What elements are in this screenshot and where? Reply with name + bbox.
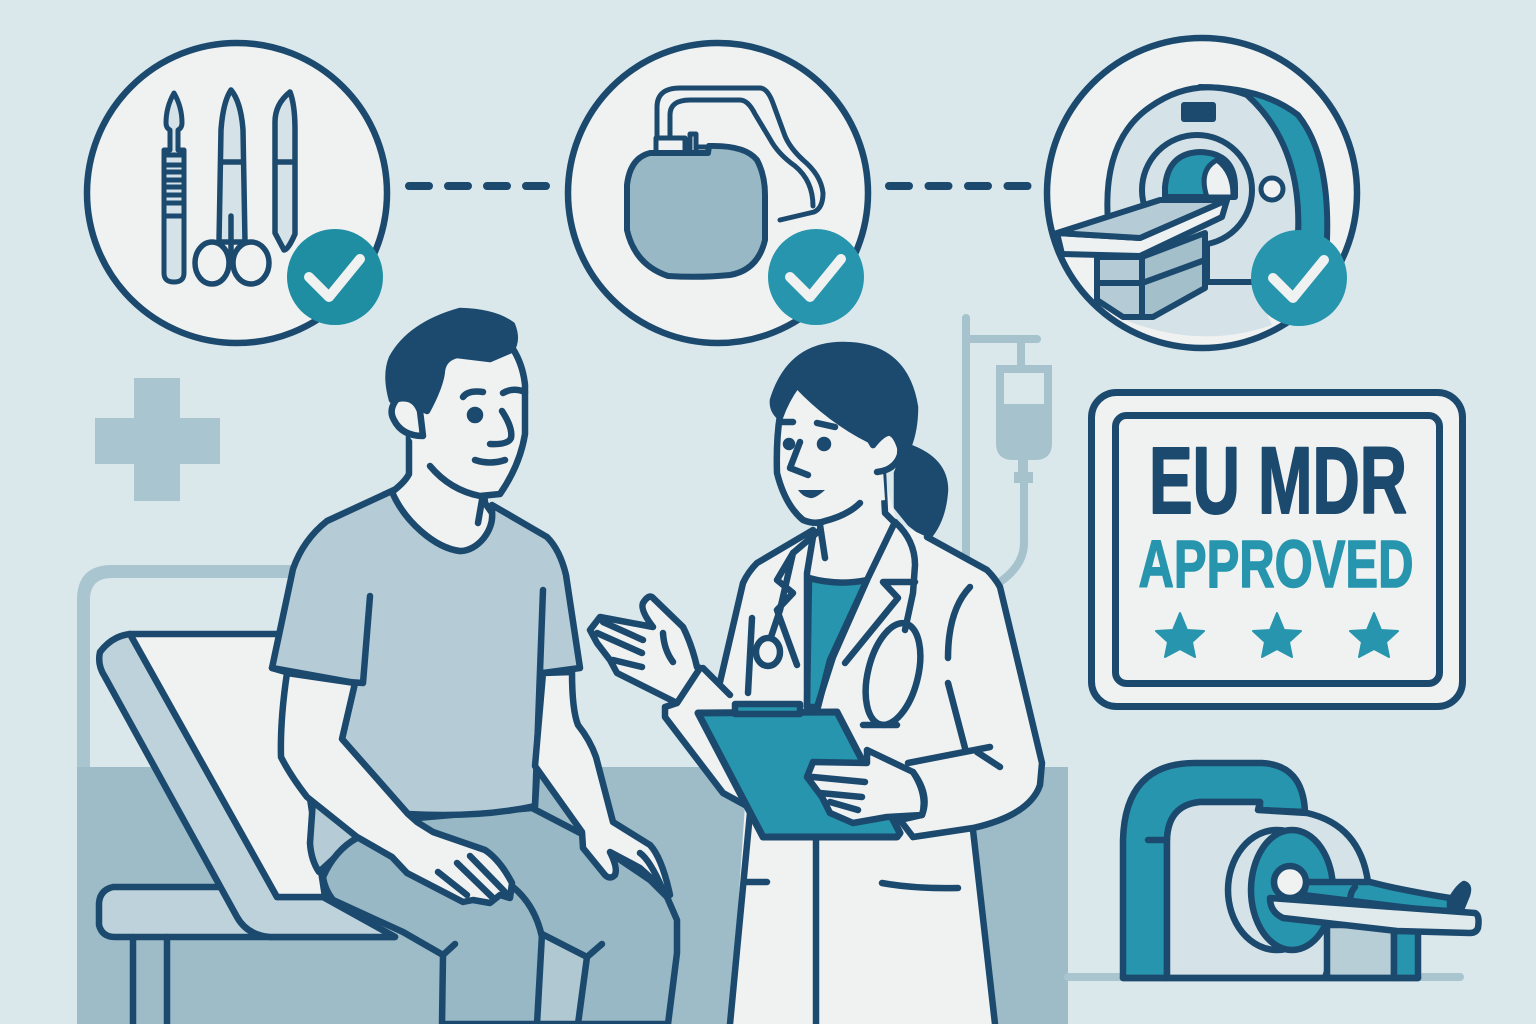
- icon: scanner display: [1181, 102, 1216, 122]
- bed backrest cushion: [130, 634, 325, 897]
- background: bed headboard: [77, 565, 300, 767]
- icon: pacemaker connector: [656, 134, 710, 155]
- icon: pacemaker body: [627, 146, 765, 277]
- patient right arm: [535, 672, 670, 895]
- stethoscope: [770, 522, 915, 725]
- icon: IV drip stand: [966, 318, 1052, 582]
- doctor coat outline: [665, 530, 1042, 1024]
- icon: blade: [275, 92, 295, 250]
- patient neck: [392, 436, 492, 551]
- patient left arm: [281, 673, 512, 903]
- patient hair: [388, 311, 515, 411]
- doctor hair: [773, 345, 915, 447]
- dashed connector: pacemaker to scanner: [889, 182, 1029, 190]
- patient face: [463, 390, 525, 462]
- patient head: [409, 349, 525, 496]
- icon: scalpel: [164, 93, 184, 282]
- icon: rating stars: [1156, 613, 1398, 657]
- heading: approved: APPROVED: [1138, 527, 1414, 602]
- icon: scanner face: [1107, 87, 1298, 282]
- doctor scrub: [807, 578, 867, 707]
- doctor head: [777, 385, 885, 523]
- stethoscope right loop: [856, 617, 930, 731]
- bed legs: [133, 937, 167, 1024]
- icon: medical cross: [95, 378, 220, 501]
- bed seat: [99, 887, 395, 937]
- clipboard clip: [735, 704, 800, 714]
- icon: approval check: [1251, 230, 1347, 326]
- doctor lapels: [748, 522, 1000, 767]
- MRI gantry: [1123, 763, 1305, 978]
- bed backrest frame: [99, 634, 395, 937]
- icon: scanner button: [1261, 178, 1283, 200]
- icon: table base side: [1142, 233, 1205, 317]
- doctor holding hand: [807, 750, 924, 823]
- illustration: MRI machine with patient: [1123, 763, 1479, 978]
- MRI patient head: [1274, 866, 1306, 898]
- MRI bore rim: [1228, 830, 1326, 950]
- MRI bore: [1251, 830, 1333, 950]
- icon: bore opening: [1204, 160, 1233, 197]
- patient shirt: [272, 490, 580, 815]
- icon: scanner bore: [1165, 152, 1235, 197]
- icon: scanner table side: [1057, 200, 1227, 256]
- icon: scanner housing: [1200, 87, 1327, 240]
- patient leg gap: [537, 934, 587, 1024]
- icon: pacemaker leads: [657, 88, 823, 220]
- doctor ear: [873, 432, 900, 472]
- icon: approval check: [287, 229, 383, 325]
- doctor gesturing hand: [590, 597, 700, 703]
- icon: table base rails: [1097, 260, 1205, 283]
- icon: scanner table base: [1097, 257, 1142, 317]
- MRI patient feet: [1447, 884, 1468, 912]
- clipboard: [698, 712, 900, 837]
- illustration: examination bed: [99, 634, 395, 1024]
- MRI table: [1270, 898, 1479, 933]
- patient trousers: [323, 808, 677, 1024]
- icon: surgical scissors: [195, 90, 269, 284]
- doctor face: [780, 422, 835, 475]
- panel: scanner device: [1047, 38, 1357, 348]
- doctor neck: [820, 473, 895, 558]
- MRI body: [1167, 802, 1368, 978]
- dashed connector: instruments to pacemaker: [409, 182, 548, 190]
- MRI patient body: [1303, 882, 1450, 913]
- figure: patient: [272, 311, 677, 1024]
- icon: approval check: [768, 229, 864, 325]
- heading: EU MDR: EU MDR: [1149, 428, 1407, 534]
- patient torso gap: [310, 800, 357, 872]
- icon: scanner table top: [1057, 200, 1227, 238]
- doctor ponytail: [897, 447, 945, 537]
- patient ear: [392, 398, 423, 436]
- stethoscope left chestpiece: [756, 638, 780, 666]
- doctor mouth: [798, 490, 825, 498]
- panel: EU MDR approved sign: [1092, 392, 1462, 706]
- panel: pacemaker device: [568, 43, 868, 343]
- background: lower wall band: [77, 767, 1068, 1024]
- icon: scanner ring: [1142, 135, 1252, 245]
- figure: doctor: [590, 345, 1042, 1024]
- doctor coat: [665, 473, 1042, 1024]
- MRI table leg teal: [1394, 928, 1418, 978]
- background: floor line: [1068, 973, 1460, 981]
- MRI table leg: [1327, 925, 1394, 978]
- panel: surgical instruments: [87, 43, 387, 343]
- icon: scanner floor: [1125, 282, 1272, 336]
